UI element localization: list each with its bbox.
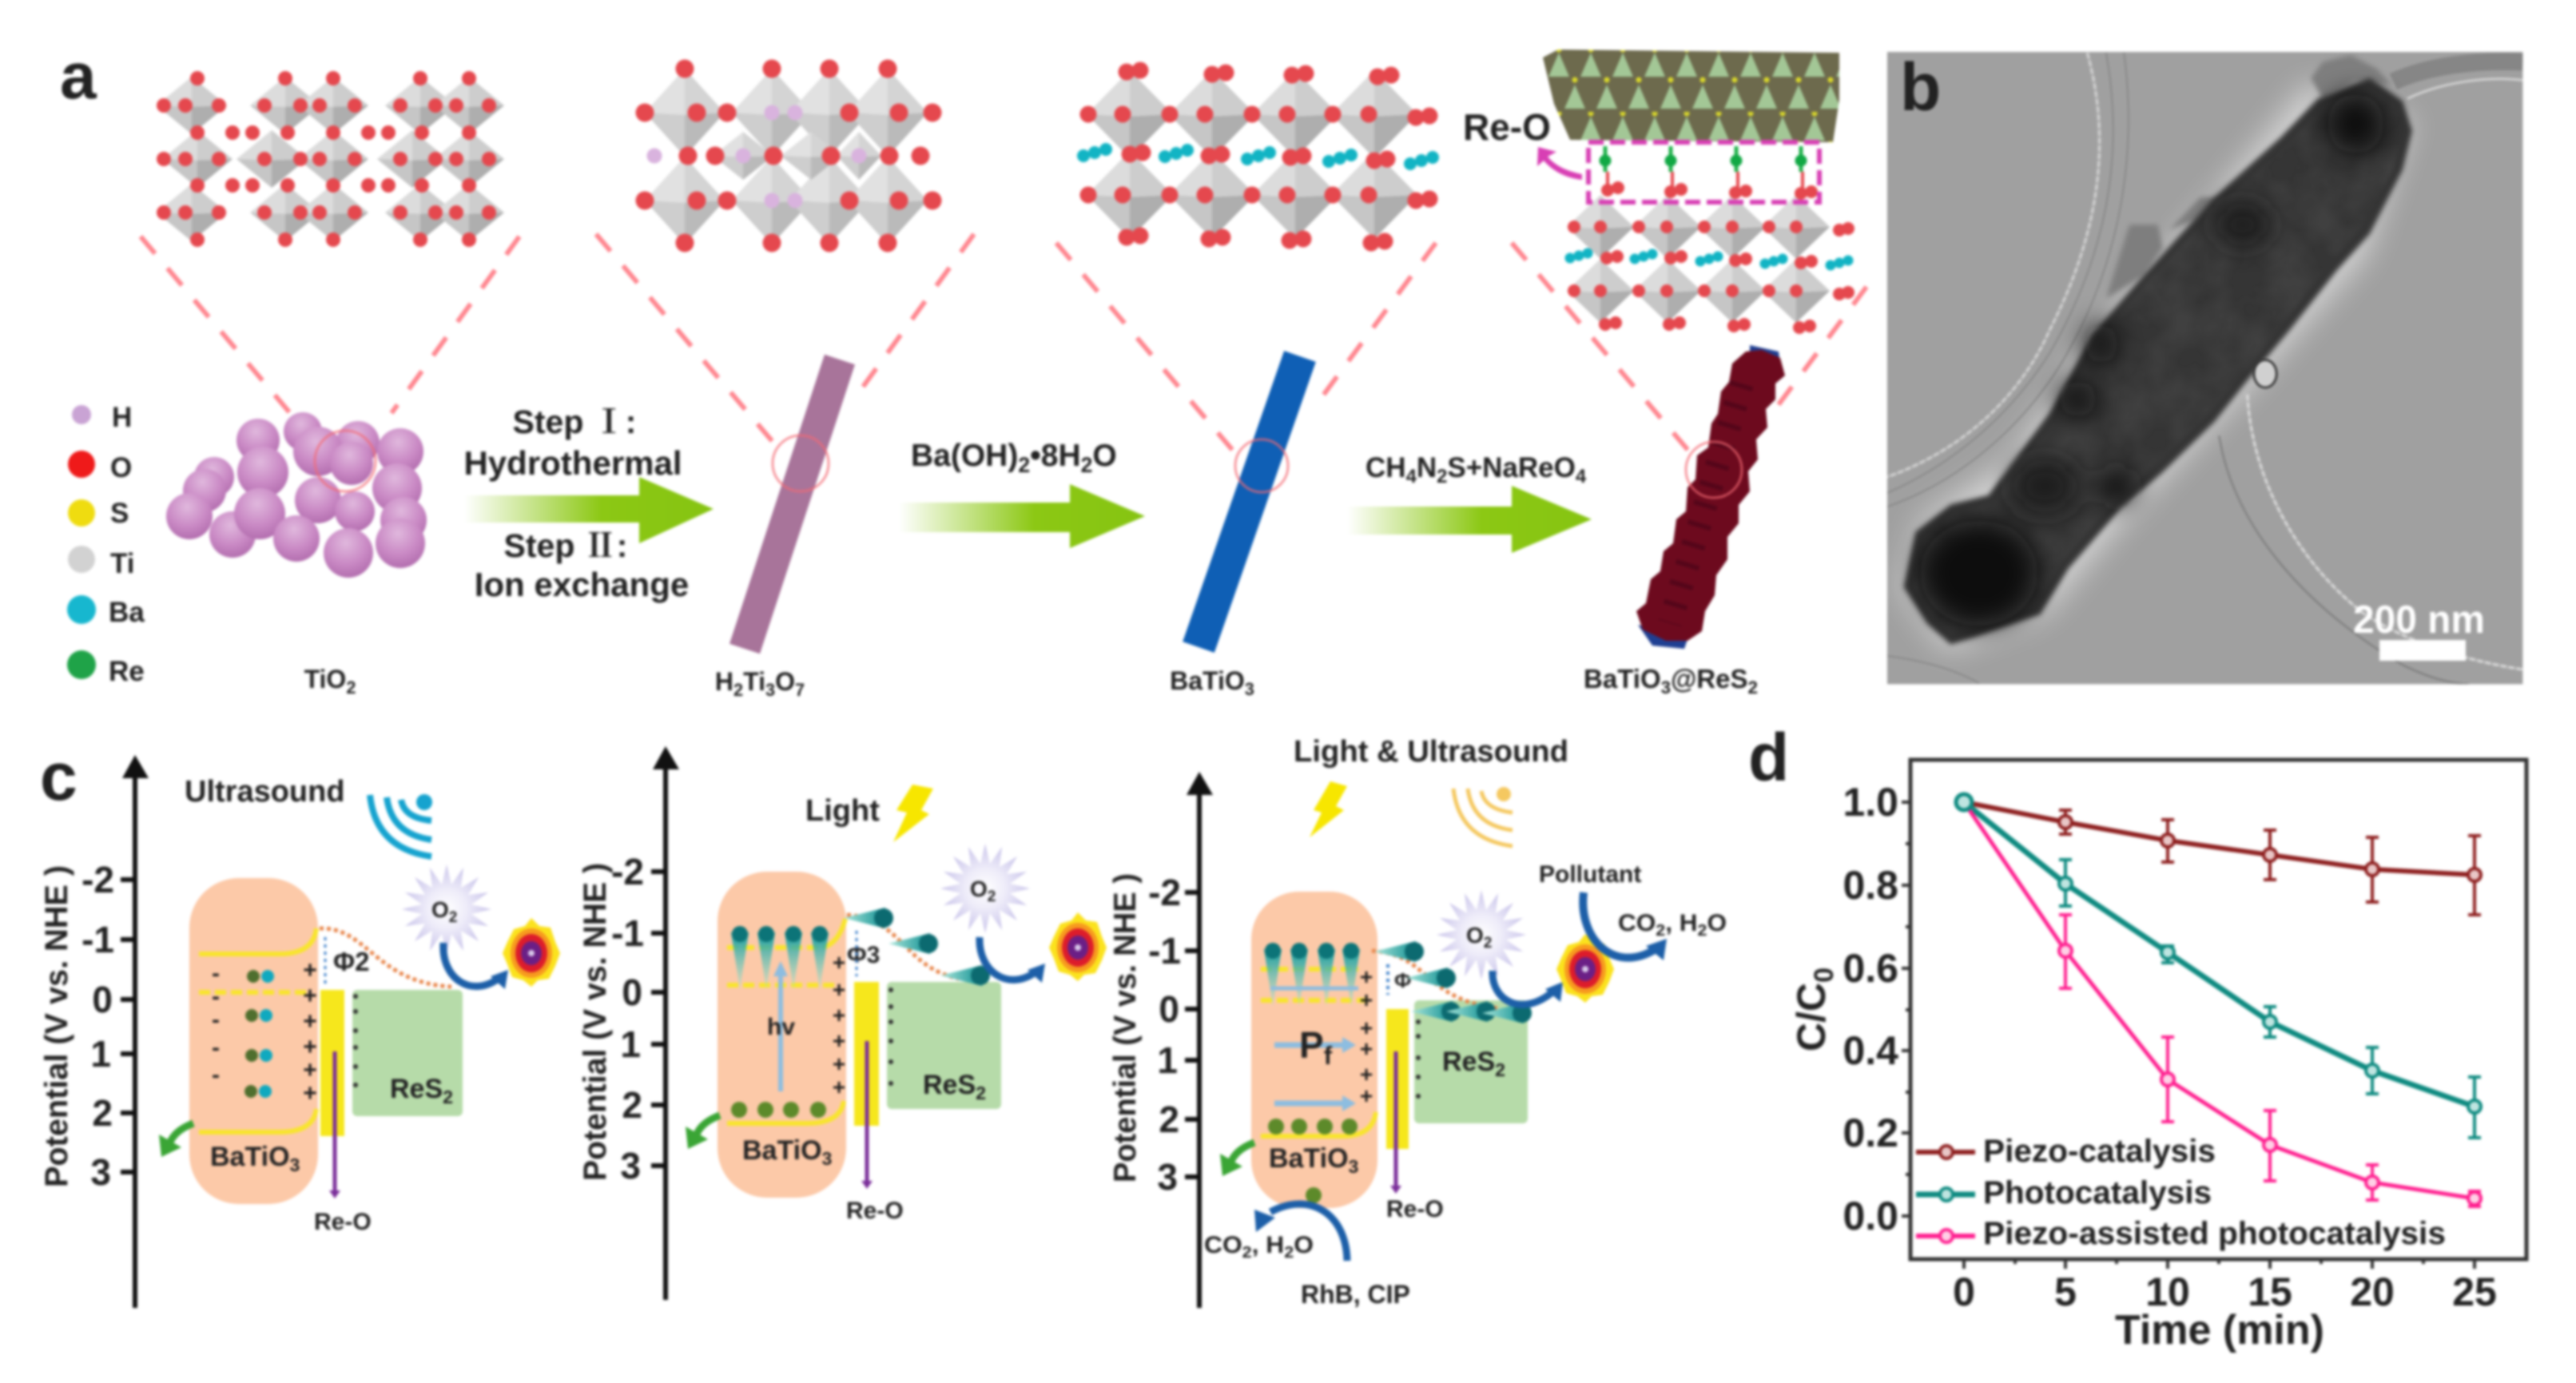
positive charges: + bbox=[833, 977, 845, 1002]
atom names: Re bbox=[109, 656, 145, 687]
positive charges: + bbox=[1360, 1083, 1373, 1108]
x axis numbers: 20 bbox=[2350, 1270, 2395, 1314]
charges: + bbox=[303, 957, 317, 984]
axis numbers: 3 bbox=[90, 1151, 111, 1193]
heading Light and Ultrasound: Light & Ultrasound bbox=[1294, 735, 1568, 769]
BaTiO3 label: BaTiO bbox=[1269, 1143, 1349, 1174]
BaTiO3 label: 3 bbox=[290, 1154, 300, 1175]
axis numbers bbox=[1148, 872, 1181, 1198]
series: photocatalysis bbox=[1964, 802, 2481, 1138]
H2Ti3O7 nanorod bbox=[745, 360, 840, 649]
x axis numbers: 15 bbox=[2248, 1270, 2292, 1314]
compound names: 2 bbox=[1747, 678, 1758, 697]
compound names: @ReS bbox=[1671, 664, 1747, 693]
product label: CO bbox=[1204, 1232, 1240, 1258]
legend row: piezo-assisted photocatalysis: Piezo-assisted photocatalysis bbox=[1983, 1216, 2446, 1251]
potential axis bbox=[1185, 772, 1213, 1308]
axis numbers: 2 bbox=[622, 1084, 642, 1126]
BaTiO3 label: BaTiO bbox=[742, 1135, 822, 1166]
scale bar bbox=[2379, 640, 2466, 661]
electron-hole pairs bbox=[251, 976, 268, 1091]
crystal structure: BaTiO3@ReS2 with Re-O bonds bbox=[1463, 50, 1848, 328]
BaTiO3 capsule bbox=[1251, 892, 1377, 1208]
polarization label: f bbox=[1324, 1042, 1333, 1070]
ReS2 surface dots bbox=[888, 990, 893, 1083]
axis numbers: 0 bbox=[622, 972, 642, 1013]
Re-O bonds bbox=[1605, 146, 1803, 193]
reagent label CH4N2S: 2 bbox=[1437, 466, 1447, 487]
compound names: 2 bbox=[733, 680, 743, 700]
reagent label CH4N2S: CH bbox=[1366, 452, 1406, 483]
reaction arrow bbox=[980, 937, 1045, 983]
series: piezo-catalysis bbox=[1964, 802, 2481, 915]
electron pathway bbox=[847, 915, 959, 979]
Re-O dashed highlight box bbox=[1588, 142, 1819, 202]
scale bar label: 200 nm bbox=[2353, 598, 2485, 642]
green arrow bbox=[686, 1115, 720, 1149]
compound names: O bbox=[775, 667, 795, 696]
arrow: Ba(OH)2 bbox=[899, 484, 1145, 548]
positive charges: + bbox=[833, 1051, 845, 1076]
holes bbox=[1276, 1127, 1350, 1195]
axis numbers: -1 bbox=[611, 912, 644, 954]
compound names bbox=[304, 664, 1758, 700]
axis numbers: 0 bbox=[92, 979, 113, 1020]
BaTiO3@ReS2 nanorod bbox=[1636, 345, 1785, 649]
Re-O label: Re-O bbox=[1463, 106, 1551, 148]
charges: + bbox=[303, 1008, 317, 1035]
reagent label CH4N2S: N bbox=[1417, 452, 1437, 483]
excited electrons bbox=[731, 926, 829, 990]
electron pathway bbox=[1372, 951, 1498, 1008]
ReS2 surface dots bbox=[353, 996, 358, 1085]
axis numbers: 2 bbox=[1159, 1099, 1179, 1140]
axis numbers: 3 bbox=[1157, 1156, 1178, 1198]
panel label c: c bbox=[40, 739, 78, 814]
charges: - bbox=[212, 1035, 220, 1061]
product label: 2 bbox=[1284, 1244, 1294, 1262]
panel b: TEM image bbox=[1887, 50, 2522, 684]
y axis numbers: 0.0 bbox=[1843, 1194, 1898, 1238]
TEM micrograph bbox=[1887, 52, 2522, 684]
radical species bbox=[503, 918, 560, 987]
axis numbers: -1 bbox=[81, 919, 114, 960]
Re-O interface bar bbox=[320, 990, 344, 1136]
green arrow bbox=[159, 1123, 193, 1157]
ReS2 label: ReS bbox=[923, 1070, 976, 1100]
reagent label Ba(OH)2: •8H bbox=[1030, 439, 1081, 473]
axis numbers: -2 bbox=[81, 859, 114, 900]
product label: 2 bbox=[1698, 922, 1707, 940]
crystal structure: BaTiO3 bbox=[1083, 70, 1433, 243]
reagent label CH4N2S: S+NaReO bbox=[1447, 452, 1576, 483]
band edges bbox=[1261, 969, 1376, 1136]
electron pathway bbox=[320, 928, 451, 987]
positive charges: + bbox=[1360, 1036, 1373, 1061]
ReS2 box bbox=[352, 990, 463, 1116]
reagent label CH4N2S: 4 bbox=[1406, 466, 1417, 487]
BaTiO3 label: BaTiO bbox=[210, 1142, 290, 1172]
Re-O interface bar bbox=[854, 982, 879, 1126]
panel label d: d bbox=[1748, 720, 1789, 795]
charges: + bbox=[303, 1080, 317, 1107]
migrating electrons bbox=[1374, 941, 1532, 1023]
Re-O label: Re-O bbox=[1386, 1196, 1444, 1222]
BaTiO3 capsule bbox=[718, 872, 846, 1198]
ReS2 label: 2 bbox=[443, 1087, 453, 1107]
compound names: TiO bbox=[304, 665, 346, 693]
reagent label Ba(OH)2: O bbox=[1092, 439, 1117, 473]
x axis numbers: 0 bbox=[1953, 1270, 1975, 1314]
icon: ultrasound waves bbox=[1453, 787, 1513, 846]
atom legend bbox=[67, 402, 145, 687]
barrier arrow bbox=[855, 931, 858, 976]
excitation arrow bbox=[773, 961, 788, 1091]
Phi 3 barrier label: Φ3 bbox=[847, 942, 880, 968]
potential axis bbox=[121, 755, 149, 1308]
oxygen burst bbox=[402, 864, 491, 954]
charges: + bbox=[303, 983, 317, 1009]
x axis numbers bbox=[1953, 1270, 2497, 1314]
oxygen burst: O bbox=[970, 876, 988, 901]
compound names: 2 bbox=[346, 678, 356, 697]
compound names: BaTiO bbox=[1584, 664, 1661, 693]
legend row: photocatalysis: Photocatalysis bbox=[1983, 1175, 2212, 1210]
atom names: O bbox=[110, 452, 132, 483]
compound names: H bbox=[715, 667, 733, 696]
y axis numbers: 1.0 bbox=[1843, 780, 1898, 825]
band edges bbox=[727, 919, 845, 1123]
heading Ultrasound: Ultrasound bbox=[185, 775, 345, 809]
Re-O label: Re-O bbox=[314, 1209, 372, 1235]
pollutant label: RhB, CIP bbox=[1301, 1280, 1410, 1309]
positive charges: + bbox=[833, 950, 845, 975]
charges bbox=[212, 957, 317, 1107]
y axis title: C/C bbox=[1789, 983, 1834, 1051]
BaTiO3 capsule bbox=[189, 878, 318, 1204]
ReS2 label: ReS bbox=[1442, 1047, 1495, 1077]
axis title: Potential (V vs. NHE ) bbox=[1108, 873, 1143, 1182]
axis numbers: 2 bbox=[92, 1092, 113, 1134]
axis numbers: -1 bbox=[1148, 930, 1181, 972]
migrating electrons bbox=[844, 908, 990, 986]
step 1 and 2 labels: Ion exchange bbox=[475, 566, 689, 603]
BaTiO3 label: 3 bbox=[822, 1148, 833, 1169]
oxygen burst bbox=[1437, 890, 1526, 980]
product label: 2 bbox=[1242, 1244, 1252, 1262]
charges: - bbox=[212, 960, 220, 987]
atom names: H bbox=[112, 402, 132, 433]
panel label a: a bbox=[60, 40, 97, 113]
x axis title: Time (min) bbox=[2115, 1307, 2324, 1353]
radical species bbox=[1049, 912, 1107, 981]
polarization label: P bbox=[1299, 1024, 1324, 1066]
panel c: band diagrams bbox=[39, 735, 1727, 1309]
ReS2 box bbox=[887, 982, 1001, 1109]
Re-O bond arrow bbox=[861, 1041, 873, 1189]
TiO2 particle cluster bbox=[166, 412, 427, 578]
barrier arrow bbox=[1386, 964, 1389, 995]
oxygen burst: 2 bbox=[988, 888, 996, 905]
product label: , H bbox=[1252, 1232, 1284, 1258]
Re-O bond arrow bbox=[329, 1051, 340, 1198]
zoom guide dashed lines bbox=[141, 234, 1866, 451]
pollutant arc bbox=[1583, 892, 1667, 960]
axis numbers: 1 bbox=[1157, 1039, 1178, 1081]
oxygen burst: O bbox=[431, 897, 449, 922]
compound names: 3 bbox=[765, 680, 775, 700]
axis title: Potential (V vs. NHE ) bbox=[39, 865, 74, 1187]
reaction arrow bbox=[1493, 971, 1563, 1004]
common start marker bbox=[1956, 794, 1972, 810]
potential axis bbox=[651, 746, 679, 1300]
reagent label CH4N2S: 4 bbox=[1576, 466, 1587, 487]
reaction arrow bbox=[443, 943, 508, 989]
series: piezo-assisted photocatalysis bbox=[1964, 802, 2481, 1206]
band diagram: ultrasound bbox=[39, 755, 560, 1308]
panel label b: b bbox=[1900, 50, 1941, 125]
oxygen burst: O bbox=[1466, 923, 1484, 948]
panel a: synthesis scheme bbox=[60, 40, 1866, 700]
charges: - bbox=[212, 1062, 220, 1088]
Re-O label: Re-O bbox=[846, 1198, 904, 1224]
positive charges: + bbox=[1360, 964, 1373, 989]
y axis title: 0 bbox=[1809, 968, 1839, 983]
chart legend bbox=[1916, 1134, 2446, 1251]
crystal structure: TiO2 bbox=[157, 77, 504, 241]
atom names: S bbox=[110, 498, 129, 529]
oxygen burst bbox=[940, 844, 1030, 933]
oxygen burst: 2 bbox=[1484, 935, 1492, 952]
atom spheres bbox=[67, 405, 96, 679]
reagent label Ba(OH)2: 2 bbox=[1018, 453, 1030, 477]
charges: - bbox=[212, 984, 220, 1010]
icon: ultrasound waves bbox=[370, 794, 432, 856]
Phi barrier label: Φ bbox=[1394, 968, 1411, 992]
compound names: Ti bbox=[743, 667, 765, 696]
atom names bbox=[109, 402, 145, 687]
radical species bbox=[1556, 934, 1614, 1003]
arrow to Re-O bbox=[1537, 147, 1582, 180]
positive charges: + bbox=[833, 1003, 845, 1027]
ReS2 label: ReS bbox=[390, 1074, 443, 1104]
plot frame and ticks bbox=[1902, 760, 2526, 1269]
atom names: Ba bbox=[109, 597, 145, 628]
band edges bbox=[199, 928, 316, 1132]
charges: + bbox=[303, 1057, 317, 1083]
ReS2 surface dots bbox=[1416, 1022, 1421, 1096]
arrow: step I and II bbox=[464, 477, 714, 543]
step 1 and 2 labels: Step Ⅱ: bbox=[504, 527, 627, 564]
positive charges bbox=[1360, 964, 1373, 1108]
y axis numbers: 0.4 bbox=[1843, 1028, 1898, 1073]
panel d: degradation line chart bbox=[1748, 720, 2526, 1353]
BaTiO3 nanorod bbox=[1199, 356, 1300, 647]
icon: lightning bolt bbox=[1310, 781, 1347, 837]
axis numbers bbox=[611, 851, 644, 1186]
y axis numbers: 0.2 bbox=[1843, 1111, 1898, 1155]
zoom circles bbox=[315, 431, 1742, 498]
axis numbers: 3 bbox=[620, 1145, 641, 1186]
reagent label Ba(OH)2: 2 bbox=[1081, 453, 1092, 477]
Re-O bond arrow bbox=[1390, 1051, 1401, 1194]
positive charges: + bbox=[833, 1028, 845, 1053]
y axis numbers: 0.6 bbox=[1843, 946, 1898, 991]
product label: O bbox=[1707, 910, 1727, 936]
axis numbers: 0 bbox=[1159, 988, 1179, 1030]
ReS2 label: 2 bbox=[1495, 1059, 1505, 1080]
band diagram: light bbox=[578, 746, 1107, 1300]
x axis numbers: 10 bbox=[2145, 1270, 2190, 1314]
positive charges: + bbox=[833, 1075, 845, 1099]
y axis numbers: 0.8 bbox=[1843, 863, 1898, 908]
axis numbers: -2 bbox=[611, 851, 644, 892]
axis numbers: -2 bbox=[1148, 872, 1181, 913]
heading Light: Light bbox=[805, 794, 880, 828]
band diagram: light and ultrasound bbox=[1108, 735, 1727, 1309]
polarization arrows bbox=[1270, 988, 1358, 1111]
legend row: piezo-catalysis: Piezo-catalysis bbox=[1983, 1134, 2216, 1169]
step 1 and 2 labels bbox=[463, 403, 689, 603]
compound names: BaTiO bbox=[1170, 666, 1245, 695]
Re-O interface bar bbox=[1386, 1009, 1409, 1149]
positive charges: + bbox=[1360, 1015, 1373, 1040]
y axis numbers bbox=[1843, 780, 1898, 1238]
atom names: Ti bbox=[110, 548, 134, 579]
positive charges bbox=[833, 950, 845, 1099]
product label: 2 bbox=[1656, 922, 1665, 940]
BaTiO3 label: 3 bbox=[1349, 1156, 1359, 1177]
Pollutant label: Pollutant bbox=[1539, 861, 1641, 888]
axis numbers: 1 bbox=[620, 1023, 641, 1065]
step 1 and 2 labels: Hydrothermal bbox=[463, 444, 682, 482]
product label: CO bbox=[1618, 910, 1654, 936]
compound names: 7 bbox=[795, 680, 805, 700]
charges: - bbox=[212, 1007, 220, 1033]
degradation arc bbox=[1254, 1204, 1347, 1261]
ReS2 box bbox=[1414, 1000, 1528, 1123]
arrow: CH4N2S bbox=[1347, 486, 1592, 553]
positive charges: + bbox=[1360, 1062, 1373, 1087]
reagent label Ba(OH)2: Ba(OH) bbox=[911, 439, 1018, 473]
positive charges: + bbox=[1360, 988, 1373, 1012]
ReS2 label: 2 bbox=[976, 1083, 986, 1103]
lower BaTiO3 octahedra bbox=[1567, 188, 1848, 328]
barrier arrow bbox=[324, 937, 326, 984]
Phi 2 barrier label: Φ2 bbox=[333, 947, 369, 976]
compound names: 3 bbox=[1661, 678, 1671, 697]
charges: + bbox=[303, 1034, 317, 1060]
excited electrons bbox=[1264, 943, 1360, 1007]
crystal structure: H2Ti3O7 bbox=[645, 69, 932, 244]
product label: , H bbox=[1665, 910, 1698, 936]
green arrow bbox=[1220, 1143, 1254, 1176]
hv label: hv bbox=[767, 1014, 795, 1040]
product label: O bbox=[1294, 1232, 1314, 1258]
axis numbers: 1 bbox=[90, 1033, 111, 1075]
x axis numbers: 25 bbox=[2452, 1270, 2497, 1314]
axis title: Potential (V vs. NHE ) bbox=[578, 863, 613, 1181]
holes bbox=[739, 1102, 818, 1118]
axis numbers bbox=[81, 859, 114, 1193]
icon: lightning bolt bbox=[893, 785, 933, 842]
oxygen burst: 2 bbox=[449, 909, 457, 926]
step 1 and 2 labels: Step Ⅰ: bbox=[513, 403, 636, 440]
x axis numbers: 5 bbox=[2054, 1270, 2077, 1314]
compound names: 3 bbox=[1245, 679, 1254, 699]
ReS2 layer bbox=[1543, 50, 1839, 142]
